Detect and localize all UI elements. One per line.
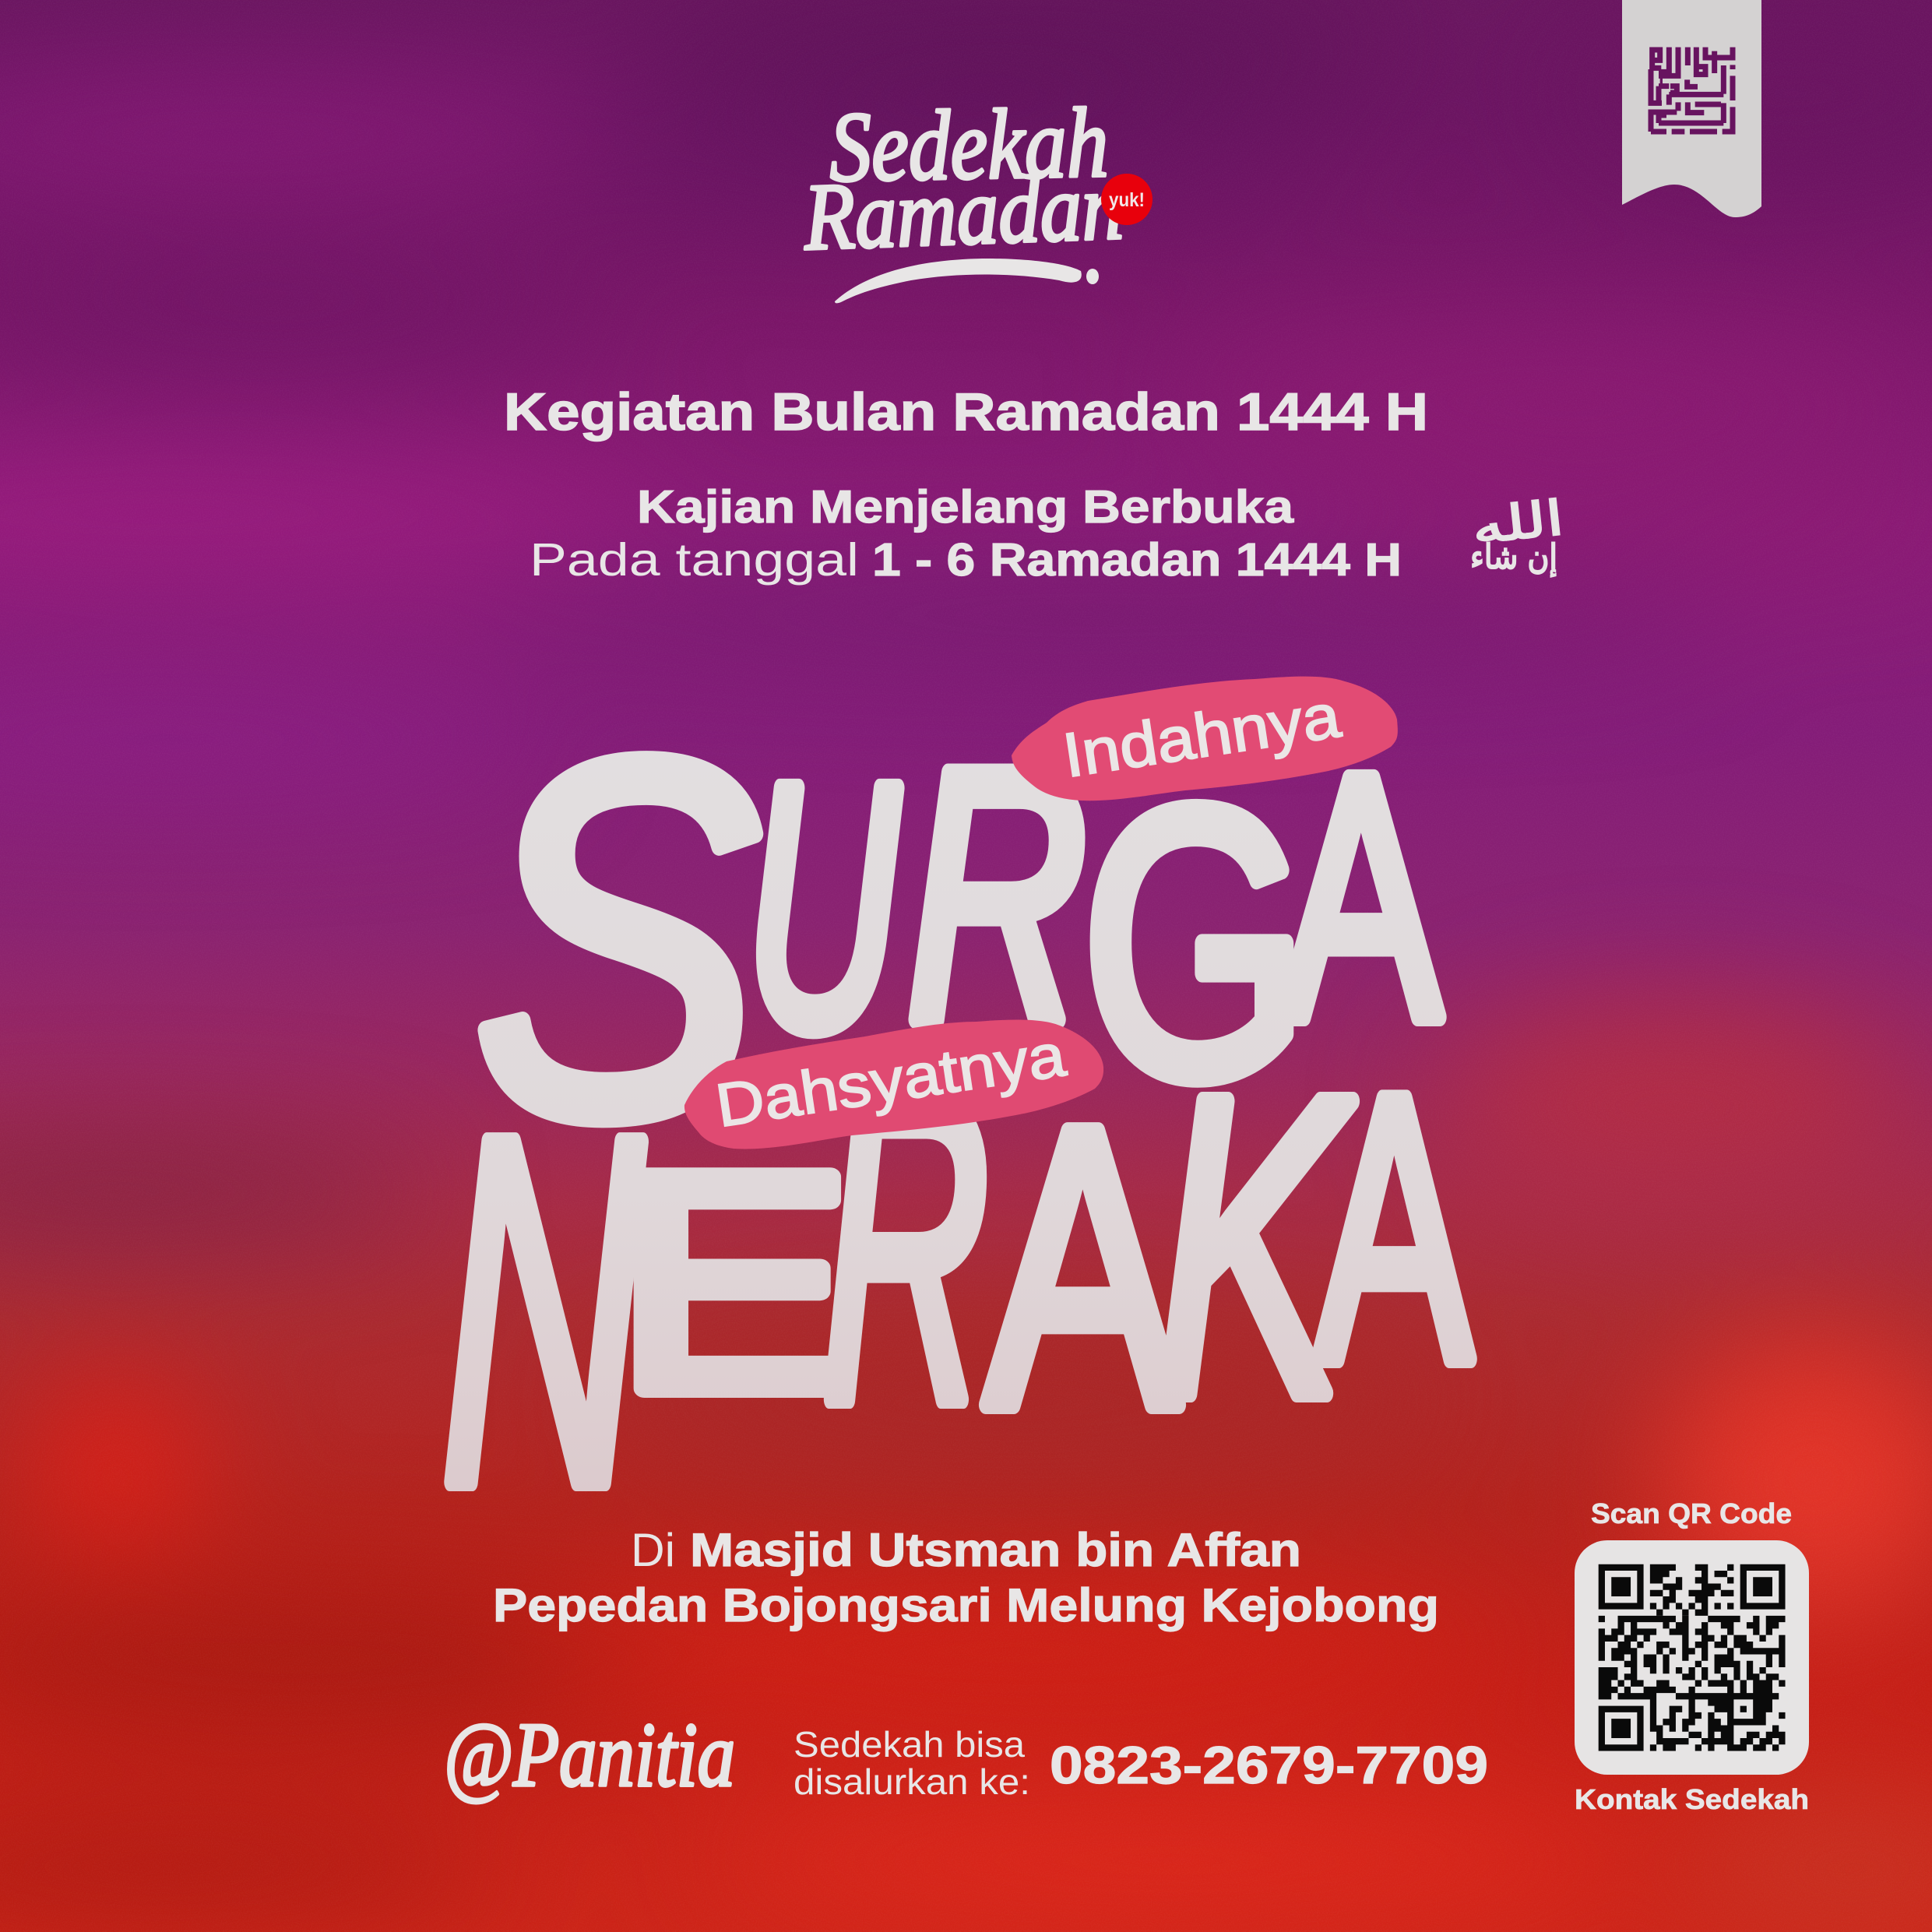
line: date: 1 - 6 Ramadan 1444 H (872, 534, 1402, 586)
text block: kajian schedule (530, 481, 1402, 586)
line: date: Pada tanggal (530, 534, 859, 586)
badge: yuk!: yuk! (1109, 189, 1145, 211)
main lettering: SURGA: R (907, 696, 1086, 1096)
logo word: Ramadan: Ramadan (801, 154, 1125, 270)
main lettering: NERAKA: R (822, 1001, 989, 1493)
organiser signature: @Panitia: @Panitia (444, 1704, 735, 1806)
main lettering: NERAKA: A (1316, 1017, 1473, 1439)
phone number: 0823-2679-7709 (1050, 1736, 1488, 1795)
logo word: Sedekah: Sedekah (829, 87, 1109, 202)
brush underline (835, 259, 1082, 303)
main lettering: SURGA: U (746, 713, 900, 1100)
underline dot (1086, 269, 1099, 284)
ribbon shape (1622, 0, 1761, 217)
line: masjid: Masjid Utsman bin Affan (690, 1524, 1301, 1576)
main lettering: SURGA: G (1082, 729, 1308, 1156)
ribbon bookmark with kufic ornament (1622, 0, 1761, 217)
icon: arabic calligraphy insya allah (1469, 489, 1566, 577)
main lettering: NERAKA: K (1156, 1010, 1358, 1483)
highlight label: Indahnya: Indahnya (1058, 681, 1345, 790)
QR caption: Kontak Sedekah (1575, 1783, 1809, 1815)
QR heading: Scan QR Code (1591, 1497, 1792, 1529)
highlight label: Dahsyatnya: Dahsyatnya (712, 1020, 1070, 1140)
icon: arabic calligraphy insya allah: الله (1469, 489, 1566, 555)
main lettering: NERAKA: A (985, 1046, 1181, 1490)
text block: venue (493, 1524, 1439, 1631)
text block: donation note (794, 1724, 1030, 1802)
highlight label: Dahsyatnya (684, 1019, 1103, 1149)
badge: yuk! (1101, 174, 1153, 225)
main lettering: SURGA: A (1281, 704, 1442, 1091)
line: masjid: Di (631, 1524, 675, 1576)
QR panel (1575, 1497, 1809, 1815)
line 1: Sedekah bisa (794, 1724, 1025, 1765)
main lettering: NERAKA: E (615, 1110, 853, 1454)
main lettering: SURGA: S (473, 656, 760, 1221)
QR code (1599, 1564, 1786, 1751)
highlight label: Indahnya (1012, 677, 1398, 801)
logo: Sedekah Ramadan yuk! (801, 87, 1153, 303)
line: address: Pepedan Bojongsari Melung Kejobong (493, 1579, 1439, 1631)
line 2: disalurkan ke: (794, 1761, 1030, 1802)
icon: arabic calligraphy insya allah: إن شاء (1470, 537, 1557, 577)
main lettering: NERAKA: N (441, 1034, 646, 1587)
QR card (1575, 1540, 1809, 1775)
line: kajian title: Kajian Menjelang Berbuka (637, 481, 1294, 533)
heading: event title: Kegiatan Bulan Ramadan 1444 H (504, 382, 1428, 442)
icon: square kufic ornament (1651, 48, 1733, 132)
